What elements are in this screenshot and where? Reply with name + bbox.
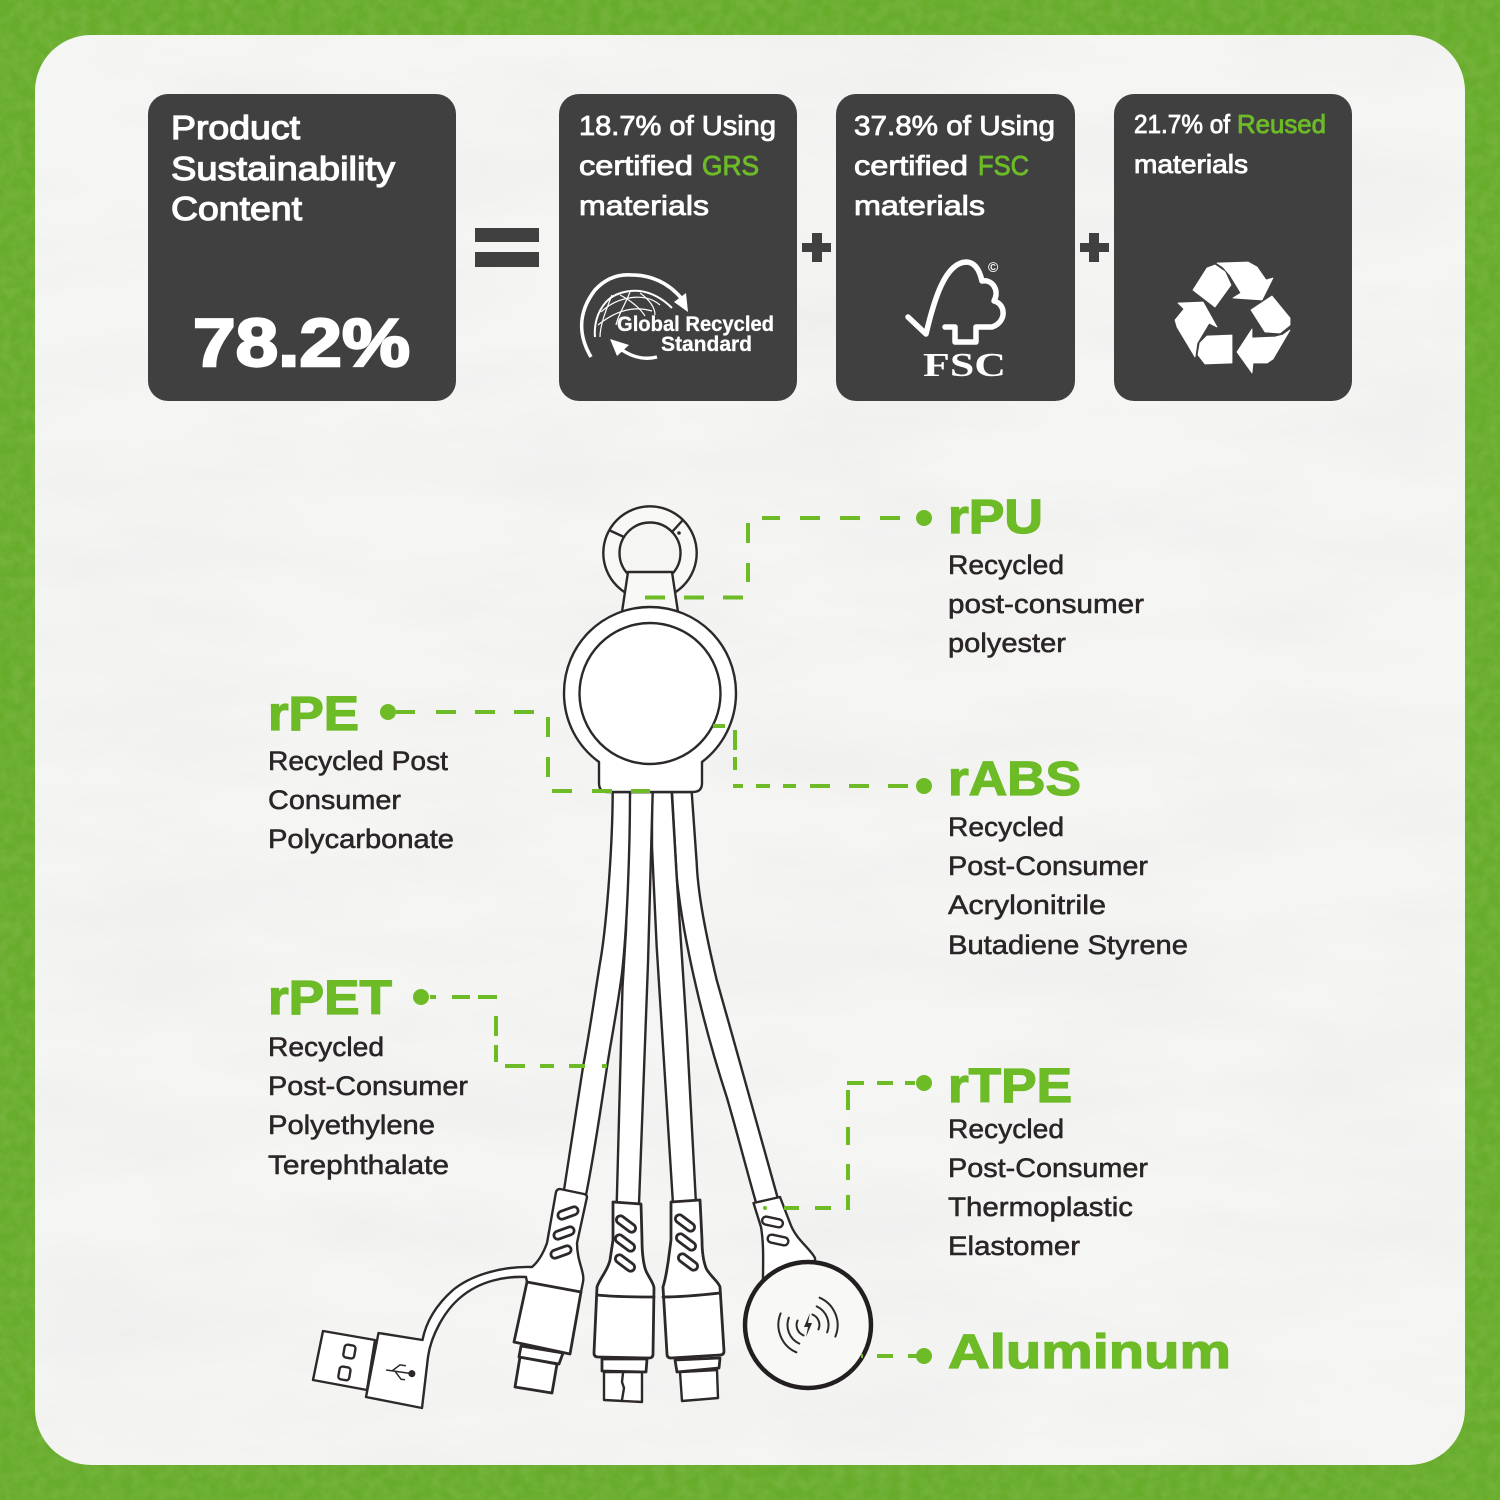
GRS text: GRS bbox=[702, 150, 759, 181]
micro usb head bbox=[594, 1202, 654, 1402]
usb boot and branch bbox=[366, 1189, 587, 1408]
rPE leader line bbox=[380, 704, 650, 791]
rPET description: Terephthalate bbox=[268, 1150, 449, 1180]
rTPE heading: rTPE bbox=[948, 1060, 1072, 1113]
heading: product sustainability content: Content bbox=[171, 190, 302, 227]
wireless charger head bbox=[745, 1197, 871, 1388]
reused text: materials bbox=[1134, 149, 1248, 179]
rPU description: Recycled bbox=[948, 550, 1064, 580]
usb symbol bbox=[385, 1363, 416, 1381]
rABS description: Recycled bbox=[948, 812, 1064, 842]
callout: rPE bbox=[268, 688, 650, 854]
heading: product sustainability content bbox=[171, 109, 396, 227]
rTPE description: Thermoplastic bbox=[948, 1192, 1133, 1222]
rABS leader line bbox=[713, 726, 932, 794]
reused text bbox=[1134, 109, 1326, 179]
cable: micro usb lead bbox=[617, 792, 653, 1204]
central medallion bbox=[564, 607, 736, 792]
icon: recycle symbol bbox=[1175, 262, 1290, 373]
FSC text bbox=[854, 110, 1055, 221]
icon: plus sign bbox=[1080, 233, 1109, 262]
aluminum leader line bbox=[861, 1348, 932, 1364]
rABS heading: rABS bbox=[948, 753, 1081, 806]
rTPE description: Recycled bbox=[948, 1114, 1064, 1144]
icon: wireless charging symbol bbox=[773, 1294, 843, 1356]
panel: reused materials bbox=[1114, 94, 1352, 401]
FSC text: FSC bbox=[978, 150, 1029, 181]
GRS text: certified bbox=[579, 150, 693, 181]
rTPE description: Elastomer bbox=[948, 1231, 1080, 1261]
rPET description: Polyethylene bbox=[268, 1110, 435, 1140]
key ring bbox=[603, 506, 697, 612]
callout: rABS bbox=[713, 726, 1188, 960]
cable: type-c lead bbox=[652, 792, 696, 1204]
usb-c head bbox=[514, 1282, 581, 1393]
type-c head bbox=[663, 1200, 724, 1401]
rPU heading: rPU bbox=[948, 491, 1043, 544]
rPE description: Polycarbonate bbox=[268, 824, 454, 854]
aluminum heading: Aluminum bbox=[948, 1326, 1231, 1379]
callout: rPU bbox=[645, 491, 1144, 658]
icon: global recycled standard logo: Global Recycled bbox=[617, 313, 774, 336]
rPET description: Post-Consumer bbox=[268, 1071, 468, 1101]
icon: global recycled standard logo: Standard bbox=[661, 333, 752, 356]
panel: FSC materials bbox=[836, 94, 1075, 401]
GRS text bbox=[579, 110, 776, 221]
rABS description: Acrylonitrile bbox=[948, 890, 1106, 920]
rPE heading: rPE bbox=[268, 688, 359, 741]
callout: rPET bbox=[268, 972, 607, 1180]
usb-a plug bbox=[313, 1331, 416, 1390]
rPET description bbox=[268, 1032, 468, 1180]
panel: product sustainability content total bbox=[148, 94, 456, 401]
illustration: charging cable bbox=[313, 506, 871, 1408]
callout: aluminum bbox=[861, 1326, 1231, 1379]
heading: product sustainability content: Product bbox=[171, 109, 300, 146]
icon: plus sign bbox=[802, 233, 831, 262]
total percentage: 78.2% bbox=[193, 305, 410, 381]
rABS description: Post-Consumer bbox=[948, 851, 1148, 881]
rTPE description bbox=[948, 1114, 1148, 1261]
rTPE leader line bbox=[763, 1075, 932, 1210]
FSC text: 37.8% of Using bbox=[854, 110, 1055, 141]
callout: rTPE bbox=[763, 1060, 1148, 1261]
cable: wireless charger lead bbox=[672, 792, 778, 1205]
rPET description: Recycled bbox=[268, 1032, 384, 1062]
icon: global recycled standard logo bbox=[582, 275, 774, 358]
FSC text: certified bbox=[854, 150, 968, 181]
rPET leader line bbox=[413, 989, 607, 1066]
rPU description bbox=[948, 550, 1144, 658]
rPU description: polyester bbox=[948, 628, 1066, 658]
rPET heading: rPET bbox=[268, 972, 392, 1025]
panel: GRS materials bbox=[559, 94, 797, 401]
rPE description bbox=[268, 746, 454, 854]
rPE description: Recycled Post bbox=[268, 746, 449, 776]
rPE description: Consumer bbox=[268, 785, 401, 815]
boot grip slots bbox=[550, 1206, 579, 1259]
rABS description: Butadiene Styrene bbox=[948, 930, 1188, 960]
rPU description: post-consumer bbox=[948, 589, 1144, 619]
icon: equals sign bbox=[475, 228, 539, 267]
icon: FSC tree logo bbox=[908, 259, 1006, 384]
FSC text: materials bbox=[854, 190, 985, 221]
icon: FSC tree logo: © bbox=[988, 259, 999, 275]
rTPE description: Post-Consumer bbox=[948, 1153, 1148, 1183]
GRS text: 18.7% of Using bbox=[579, 110, 776, 141]
heading: product sustainability content: Sustainability bbox=[171, 150, 396, 187]
reused text: 21.7% of bbox=[1134, 109, 1231, 139]
GRS text: materials bbox=[579, 190, 709, 221]
reused text: Reused bbox=[1237, 109, 1326, 139]
rABS description bbox=[948, 812, 1188, 960]
rPU leader line bbox=[645, 510, 932, 598]
cable: usb combo lead bbox=[564, 792, 630, 1195]
icon: FSC tree logo: FSC bbox=[923, 347, 1006, 384]
